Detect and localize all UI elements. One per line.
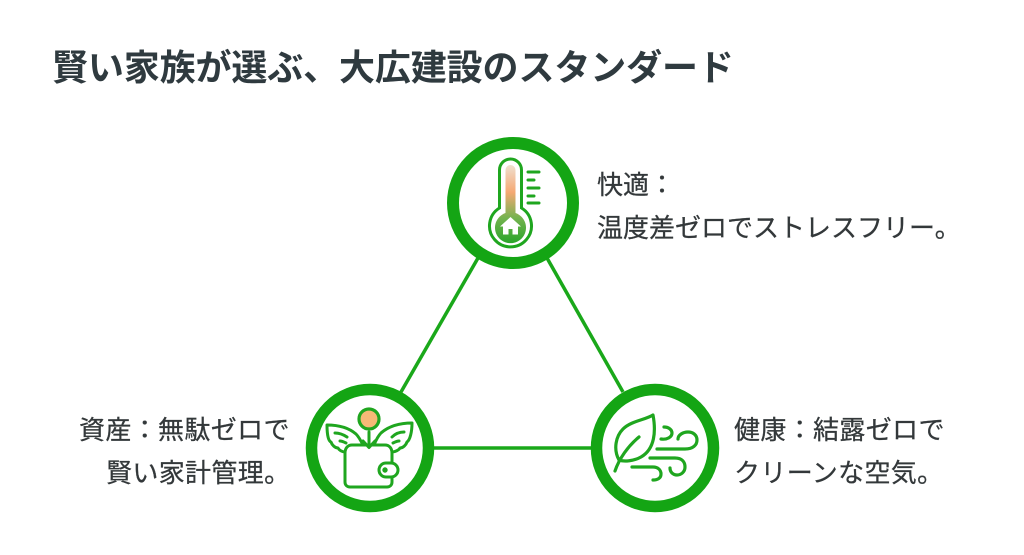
title: 賢い家族が選ぶ、大広建設のスタンダード bbox=[52, 47, 734, 88]
text: assets bbox=[79, 415, 290, 488]
icon: leaf and wind bbox=[615, 415, 697, 480]
connecting lines bbox=[401, 258, 623, 448]
text: comfort bbox=[597, 170, 961, 243]
text: assets: 賢い家計管理。 bbox=[106, 458, 290, 488]
text: assets: 資産：無駄ゼロで bbox=[79, 415, 290, 445]
text: comfort: 温度差ゼロでストレスフリー。 bbox=[597, 213, 961, 243]
text: comfort: 快適： bbox=[597, 170, 675, 200]
node: comfort thermometer bbox=[453, 143, 573, 263]
node: assets wallet bbox=[312, 390, 428, 506]
icon: thermometer bbox=[490, 159, 539, 247]
text: health: クリーンな空気。 bbox=[734, 458, 944, 488]
text: health: 健康：結露ゼロで bbox=[734, 415, 945, 445]
node: health leaf and wind bbox=[596, 390, 714, 506]
text: health bbox=[734, 415, 945, 488]
icon: winged wallet with coin bbox=[327, 409, 412, 487]
